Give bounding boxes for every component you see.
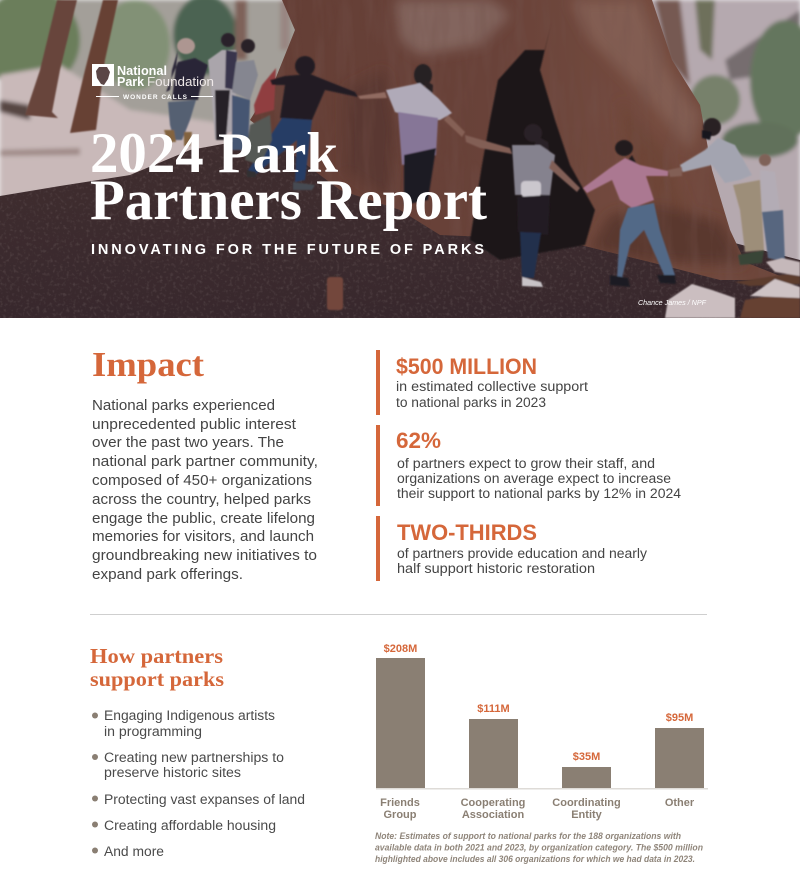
person: boy in black sweater [245,56,358,190]
stat: $500 million: in estimated collective support [396,379,588,394]
title [90,122,487,232]
person: girl in grey shirt at hollow [465,124,580,287]
stat: $500 million: $500 MILLION [396,354,537,379]
heading: How partners support parks [90,644,224,691]
bar: Coordinating Entity $35M: Entity [571,809,603,821]
logo wordmark first line: National [117,64,167,78]
bar: Other $95M: $95M [666,712,693,724]
bullet: Indigenous artists [92,708,275,739]
heading: How partners support parks: How partners [90,644,223,668]
stat: 62% [376,425,681,506]
stat: $500 million: to national parks in 2023 [396,395,546,410]
text block: impact description: groundbreaking new initiatives to [92,548,317,564]
heading: How partners support parks: support parks [90,667,224,691]
bullet: Indigenous artists: Engaging Indigenous artists [104,708,275,723]
heading: Impact: Impact [92,345,204,384]
chart note: available data in both 2021 and 2023, by organization category. The $500 million [375,842,703,852]
text block: impact description: national park partner community, [92,454,318,470]
photo credit: Chance James / NPF [638,298,706,307]
stat: two-thirds: TWO-THIRDS [397,520,537,545]
logo wordmark second line: Park [117,75,144,89]
person: woman in navy top [164,38,208,146]
bullet: protecting land: Protecting vast expanses of land [104,792,305,807]
text block: impact description: composed of 450+ organizations [92,473,312,489]
photo: tall trunks on the left [25,0,118,133]
stat: $500 million [376,350,588,415]
stat: 62%: organizations on average expect to increase [397,471,671,486]
text block: impact description: across the country, helped parks [92,492,311,508]
text block: impact description: engage the public, create lifelong [92,511,315,527]
bar: Cooperating Association $111M: Cooperating [461,797,525,809]
bar: Friends Group $208M: Group [384,809,417,821]
person: girl in pink hoodie [583,140,676,287]
bar: Other $95M: Other [665,797,695,809]
title: 2024 Park [90,122,338,185]
person: adult partly hidden at right edge [759,154,785,262]
logo: National Park Foundation [92,64,214,101]
photo: forest background [0,0,800,260]
bullet: new partnerships [92,750,284,780]
bullet list: ways partners support parks [92,708,305,859]
text block: impact description [92,398,318,583]
bullet: and more: And more [104,844,164,859]
logo tagline: WONDER CALLS [123,94,188,101]
stat: two-thirds: half support historic restoration [397,561,595,576]
photo: dark hollow in trunk [470,20,595,260]
bullet: new partnerships: Creating new partnerships to [104,750,284,765]
bar: Coordinating Entity $35M: $35M [573,751,600,763]
bar chart: support by organization category [376,643,708,821]
photo: children and adults holding hands around the tree [164,33,785,287]
bar: Friends Group $208M [376,643,425,821]
subtitle: INNOVATING FOR THE FUTURE OF PARKS [91,242,484,258]
bar: Cooperating Association $111M: $111M [477,703,510,715]
bar: Cooperating Association $111M: Association [462,809,524,821]
bar: Coordinating Entity $35M [552,751,621,821]
hero photo banner [0,0,800,318]
text block: impact description: National parks experienced [92,398,275,414]
stat: two-thirds [376,516,647,581]
stat: 62%: their support to national parks by 12% in 2024 [397,486,681,501]
person: adult in white shirt and mask [668,118,764,265]
bar: Friends Group $208M: Friends [380,797,420,809]
stat: two-thirds: of partners provide education and nearly [397,546,647,561]
bar: Other $95M [655,712,704,809]
title: Partners Report [90,169,487,232]
bullet: affordable housing: Creating affordable housing [104,818,276,833]
text block: impact description: over the past two years. The [92,435,284,451]
text block: impact description: memories for visitors, and launch [92,529,314,545]
photo: giant sequoia trunk [250,0,779,280]
bullet: new partnerships: preserve historic sites [104,765,241,780]
photo: dark tint overlay [0,0,800,318]
chart note: Note: Estimates of support to national parks for the 188 organizations with [375,831,681,841]
text block: impact description: unprecedented public interest [92,417,296,433]
text block: impact description: expand park offerings. [92,567,243,583]
logo wordmark second line: Foundation [147,75,214,89]
stat: 62%: of partners expect to grow their staff, and [397,456,655,471]
person: girl in white top with lavender wrap [358,64,465,205]
chart note [375,831,703,864]
stat: 62%: 62% [396,428,441,453]
photo: snow-covered rocks and tree stump [327,258,800,318]
photo: dark forest floor [0,142,800,318]
person: standing group at centre-left [208,33,276,150]
bullet: Indigenous artists: in programming [104,724,202,739]
chart note: highlighted above includes all 306 organizations for which we had data in 2023. [375,854,695,864]
bar: Friends Group $208M: $208M [384,643,417,655]
bar: Cooperating Association $111M [461,703,525,821]
bar: Coordinating Entity $35M: Coordinating [552,797,621,809]
icon: arrowhead shield [92,64,114,86]
